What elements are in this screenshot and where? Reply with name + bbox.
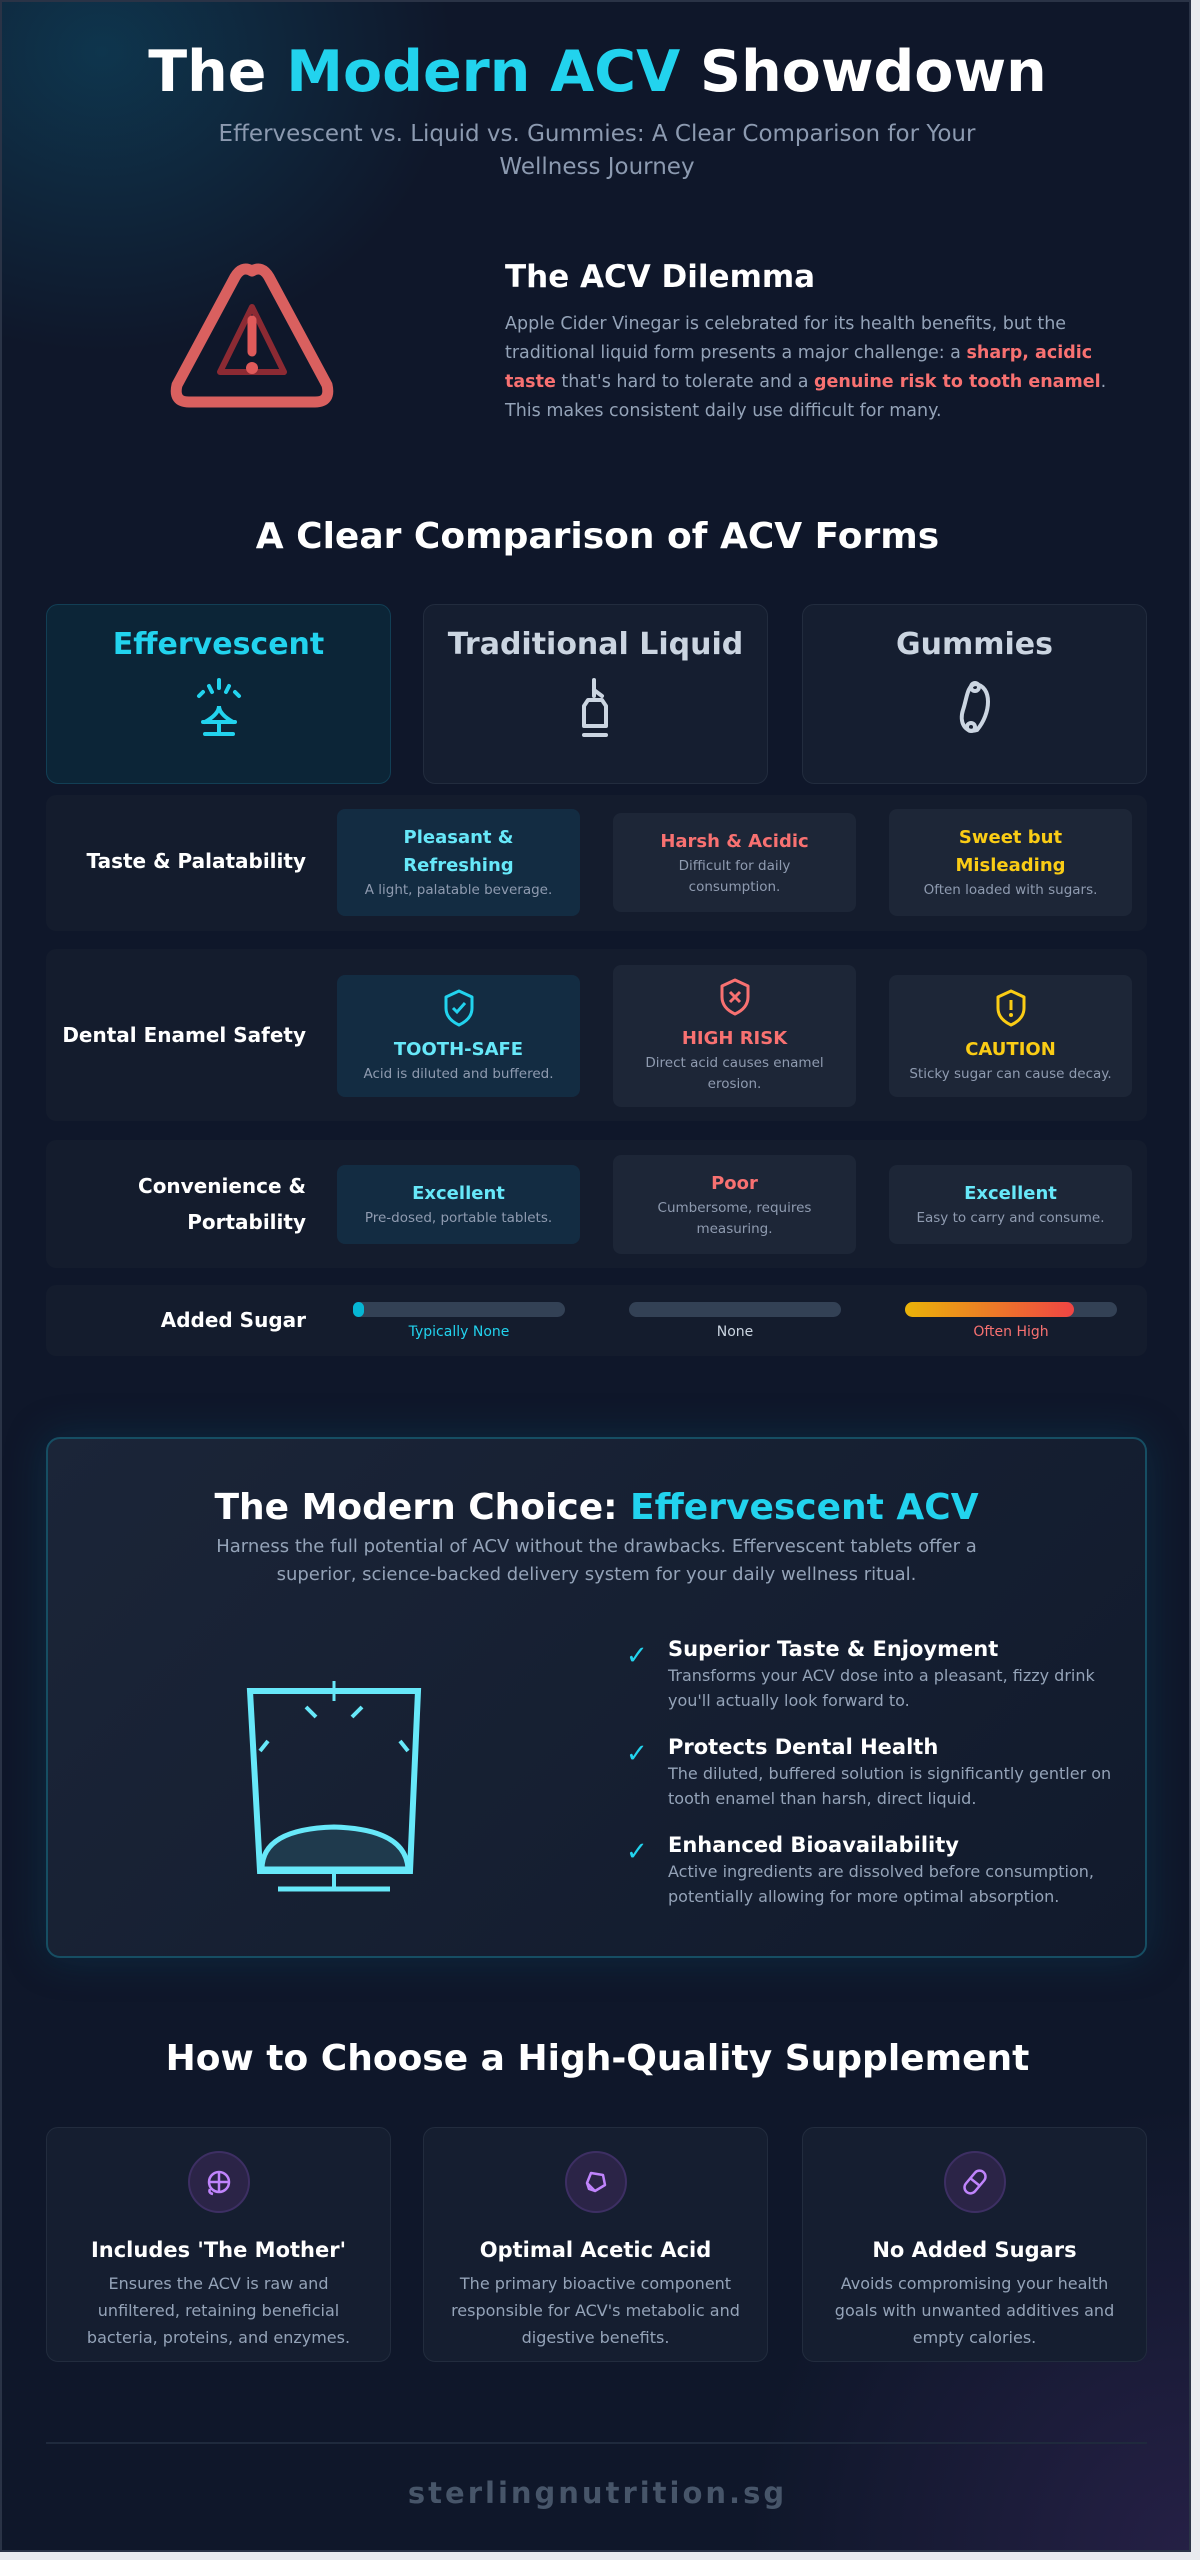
column header: gummies (802, 604, 1147, 784)
bar: gummies sugar: Often High (973, 1324, 1049, 1340)
text: modern choice intro: Harness the full potential of ACV without the drawbacks. Effervescent tablets offer a superior, science-backed delivery system for your daily wellness ritual. (216, 1536, 977, 1585)
icon: bottle (582, 678, 608, 737)
cell: liquid taste (613, 813, 856, 912)
row: dental: Dental Enamel Safety (62, 1023, 306, 1047)
cell: effervescent taste (337, 809, 580, 916)
row: added sugar (46, 1285, 1147, 1356)
heading: modern choice: The Modern Choice: Effervescent ACV (214, 1487, 979, 1528)
column header: liquid: Traditional Liquid (448, 627, 743, 662)
column header: effervescent (46, 604, 391, 784)
cell: effervescent convenience (337, 1165, 580, 1244)
cell: gummies convenience: Excellent (964, 1183, 1057, 1204)
card: no sugars (802, 2127, 1147, 2362)
bar: effervescent sugar: Typically None (409, 1324, 509, 1340)
row: dental (46, 949, 1147, 1121)
panel: modern choice (46, 1437, 1147, 1958)
bar: gummies sugar (905, 1302, 1117, 1340)
heading: ACV dilemma: The ACV Dilemma (505, 259, 815, 295)
feature: dental: Protects Dental Health (668, 1735, 938, 1759)
card: acetic acid: The primary bioactive component responsible for ACV's metabolic and digestive benefits. (451, 2274, 740, 2347)
card: acetic acid: Optimal Acetic Acid (480, 2238, 711, 2262)
card: the mother (46, 2127, 391, 2362)
feature: bioavailability: ✓ (626, 1837, 648, 1867)
bar: effervescent sugar (353, 1302, 565, 1340)
feature: taste: ✓ (626, 1641, 648, 1671)
cell: effervescent taste: A light, palatable beverage. (365, 882, 552, 898)
cell: tooth-safe: TOOTH-SAFE (394, 1038, 523, 1060)
cell: liquid taste: Difficult for daily consumption. (679, 858, 790, 894)
column header: gummies: Gummies (896, 627, 1053, 662)
row: convenience: Convenience & (138, 1174, 306, 1198)
row: convenience: Portability (187, 1210, 306, 1234)
feature: bioavailability: Enhanced Bioavailability (668, 1833, 959, 1857)
footer: brand: sterlingnutrition.sg (408, 2476, 787, 2510)
feature: taste (626, 1637, 1095, 1710)
text: dilemma body: Apple Cider Vinegar is celebrated for its health benefits, but the traditional liquid form presents a major challenge: a sharp, acidic taste that's hard to tolerate and a genuine risk to tooth enamel. This makes consistent daily use difficult for many. (505, 314, 1106, 421)
cell: effervescent convenience: Excellent (412, 1183, 505, 1204)
feature: taste: Superior Taste & Enjoyment (668, 1637, 998, 1661)
icon: fizz (196, 678, 242, 736)
cell: high risk (613, 965, 856, 1107)
card: the mother: Ensures the ACV is raw and unfiltered, retaining beneficial bacteria, proteins, and enzymes. (87, 2274, 350, 2347)
feature: bioavailability: Active ingredients are dissolved before consumption, potentially allowing for more optimal absorption. (668, 1862, 1094, 1906)
cell: liquid convenience: Poor (711, 1172, 758, 1194)
bar: liquid sugar: None (717, 1324, 753, 1340)
heading: how to choose: How to Choose a High-Quality Supplement (166, 2038, 1029, 2079)
card: acetic acid (423, 2127, 768, 2362)
cell: tooth-safe (337, 975, 580, 1097)
card: the mother: Includes 'The Mother' (91, 2238, 346, 2262)
icon: warning triangle (170, 264, 334, 408)
row: convenience (46, 1140, 1147, 1268)
cell: effervescent convenience: Pre-dosed, portable tablets. (365, 1210, 552, 1226)
cell: liquid taste: Harsh & Acidic (660, 830, 809, 852)
cell: caution: CAUTION (965, 1038, 1056, 1060)
cell: gummies taste: Often loaded with sugars. (924, 882, 1097, 898)
cell: gummies convenience (889, 1165, 1132, 1244)
column header: liquid (423, 604, 768, 784)
cell: caution: Sticky sugar can cause decay. (909, 1066, 1112, 1082)
row: taste (46, 795, 1147, 931)
feature: taste: Transforms your ACV dose into a pleasant, fizzy drink you'll actually look forward to. (668, 1666, 1095, 1710)
row: taste: Taste & Palatability (87, 849, 306, 873)
title: The Modern ACV Showdown (148, 39, 1047, 105)
cell: liquid convenience (613, 1155, 856, 1254)
heading: comparison: A Clear Comparison of ACV Forms (256, 516, 939, 557)
icon: pill (944, 2151, 1006, 2213)
feature: dental (626, 1735, 1111, 1808)
cell: effervescent taste: Pleasant & Refreshing (403, 827, 514, 876)
cell: liquid convenience: Cumbersome, requires measuring. (658, 1200, 811, 1236)
feature: bioavailability (626, 1833, 1094, 1906)
row: added sugar: Added Sugar (161, 1308, 306, 1332)
subtitle: Effervescent vs. Liquid vs. Gummies: A Clear Comparison for Your Wellness Journey (219, 121, 975, 180)
bar: liquid sugar (629, 1302, 841, 1340)
cell: gummies convenience: Easy to carry and consume. (916, 1210, 1105, 1226)
feature: dental: ✓ (626, 1739, 648, 1769)
icon: mother (188, 2151, 250, 2213)
icon: acid (564, 2151, 626, 2213)
cell: gummies taste: Sweet but Misleading (955, 827, 1066, 876)
cell: tooth-safe: Acid is diluted and buffered. (363, 1066, 554, 1082)
cell: high risk: HIGH RISK (682, 1028, 787, 1049)
column header: effervescent: Effervescent (113, 627, 324, 662)
feature: dental: The diluted, buffered solution is significantly gentler on tooth enamel than harsh, direct liquid. (668, 1764, 1111, 1808)
cell: high risk: Direct acid causes enamel erosion. (645, 1055, 824, 1092)
cell: gummies taste (889, 809, 1132, 916)
icon: gummy (960, 681, 990, 733)
card: no sugars: No Added Sugars (872, 2238, 1077, 2262)
cell: caution (889, 975, 1132, 1097)
icon: glass (246, 1681, 422, 1892)
card: no sugars: Avoids compromising your health goals with unwanted additives and empty calories. (835, 2274, 1114, 2347)
